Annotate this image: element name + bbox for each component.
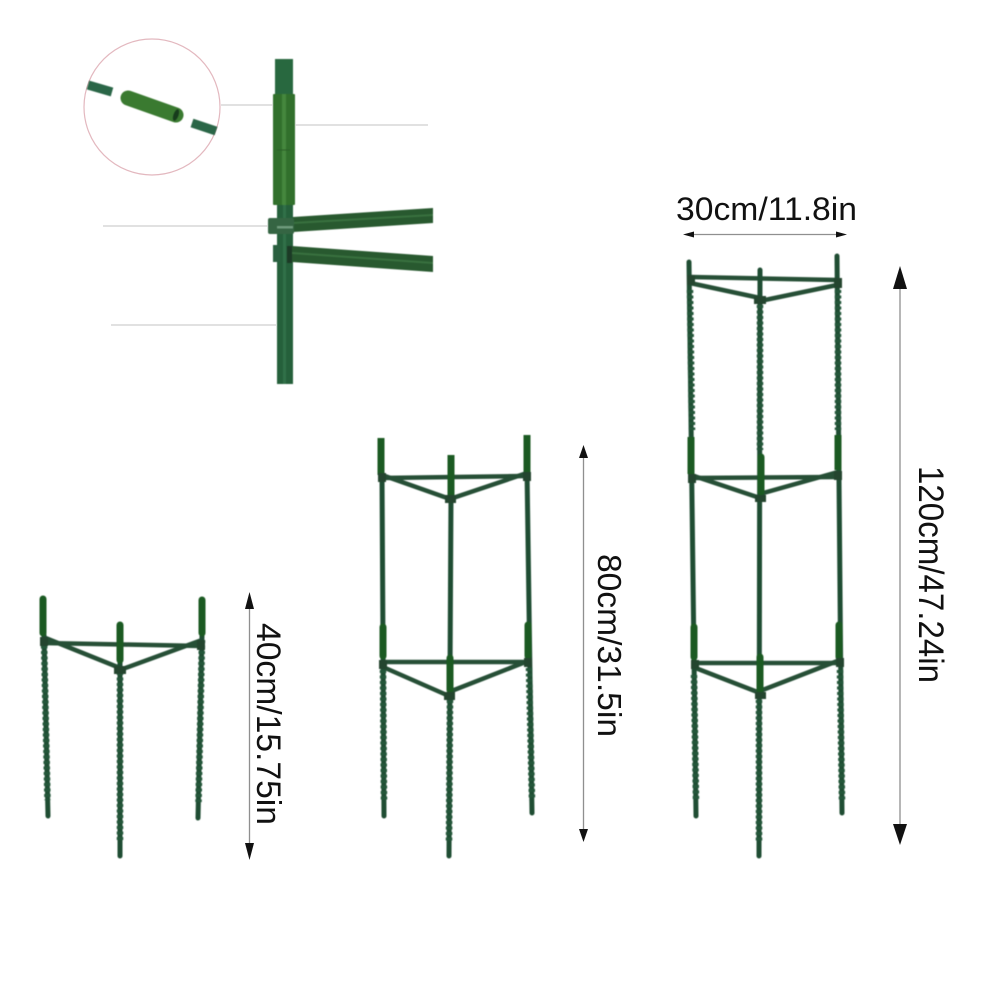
height label: 80cm: 80cm/31.5in [591,554,628,737]
detail circle inset: connector parts [84,39,220,175]
tall 120cm plant support [687,256,844,856]
leader lines [103,105,428,325]
small 40cm plant support [40,599,205,856]
width label: 30cm/11.8in [676,191,857,227]
height arrow: 120cm [893,266,907,845]
height arrow: 40cm [245,592,254,860]
width arrow [683,232,847,238]
height label: 120cm: 120cm/47.24in [911,466,950,683]
medium 80cm plant support [378,435,532,856]
height arrow: 80cm [579,445,588,842]
height label: 40cm: 40cm/15.75in [249,623,287,825]
detail view: stake, sleeve and arms [268,59,433,384]
